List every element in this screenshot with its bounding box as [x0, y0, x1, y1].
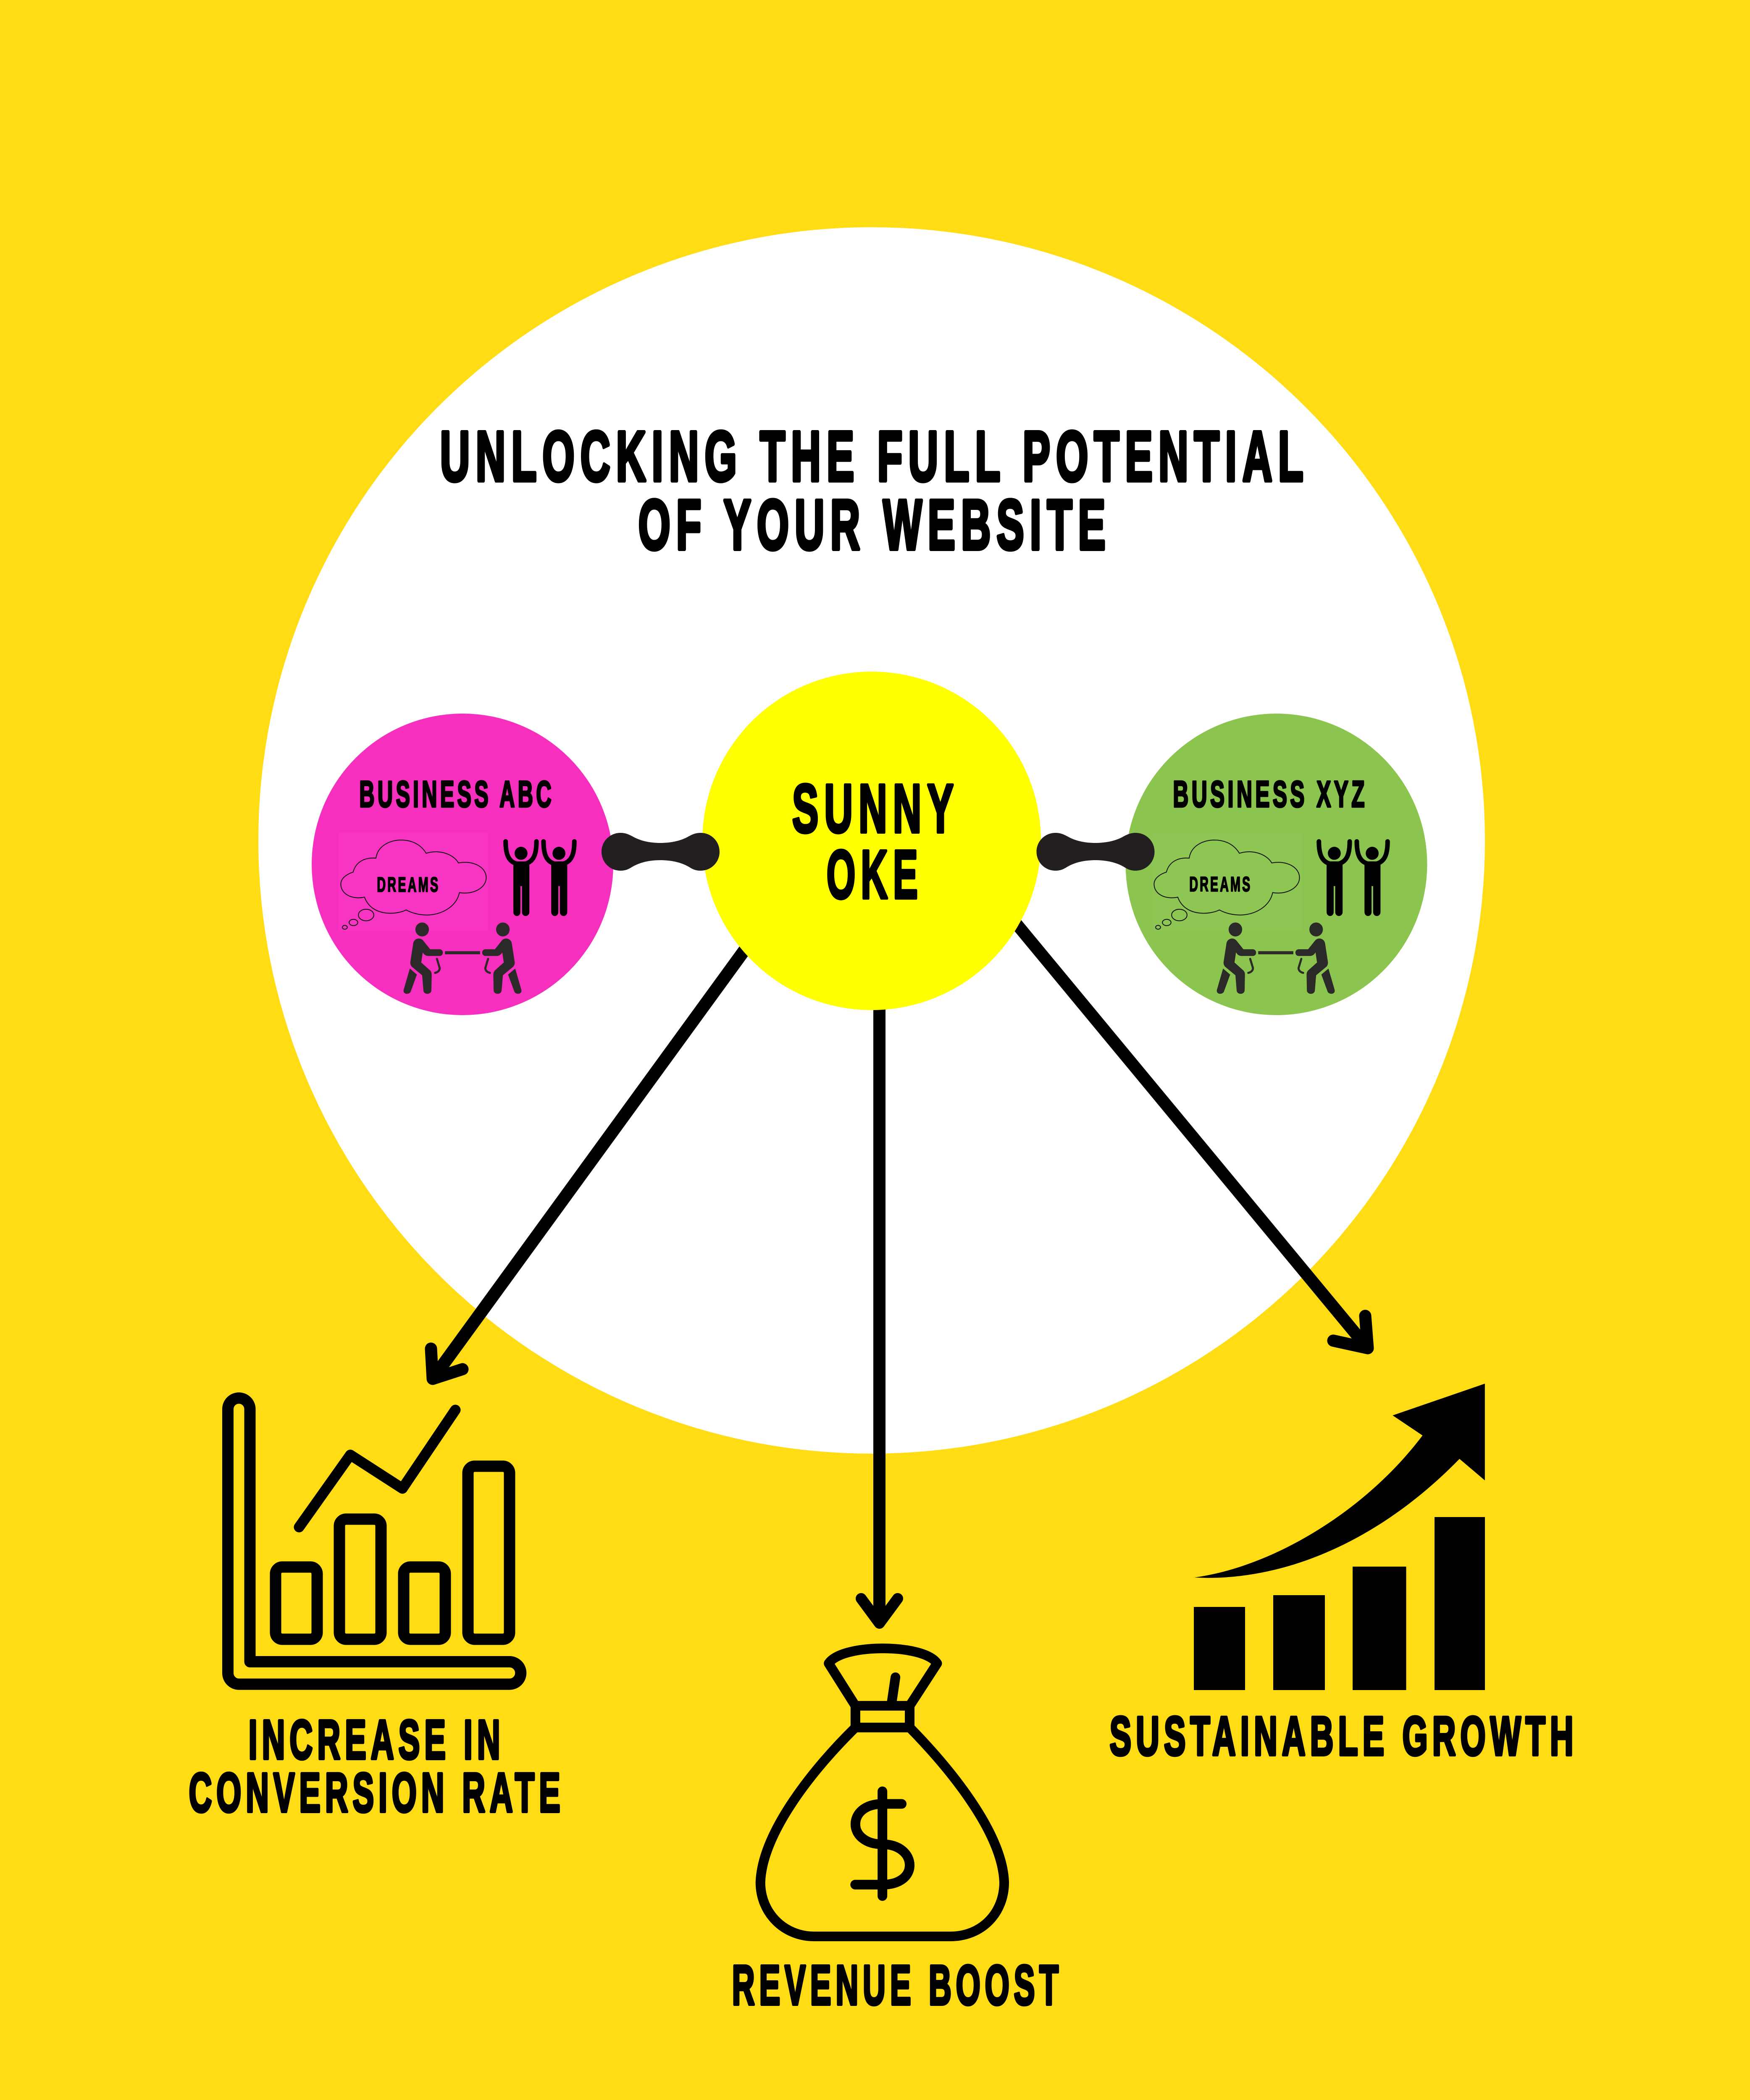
title — [440, 417, 1309, 564]
icon: bar and line chart — [228, 1398, 521, 1684]
label: increase in conversion rate: CONVERSION RATE — [189, 1761, 565, 1824]
label: increase in conversion rate — [189, 1709, 565, 1824]
panel: centre circle Sunny Oke — [702, 672, 1041, 1010]
panel: Business ABC: DREAMS — [377, 874, 440, 896]
arrow: to conversion rate — [431, 940, 752, 1379]
label: revenue boost: REVENUE BOOST — [732, 1954, 1063, 2017]
icon: money bag — [760, 1648, 1004, 1937]
arrow: to revenue boost — [861, 1000, 898, 1623]
label: increase in conversion rate: INCREASE IN — [249, 1709, 505, 1771]
panel: Business XYZ: DREAMS — [1189, 873, 1252, 896]
icon: dream cloud — [1154, 840, 1300, 929]
connector: right dumbbell — [1037, 833, 1154, 871]
panel: Business XYZ — [1126, 714, 1427, 1015]
icon: tug of war — [1217, 922, 1335, 994]
panel: Business ABC — [312, 714, 613, 1015]
panel: centre circle Sunny Oke: SUNNY — [792, 770, 959, 847]
icon: two cheering people — [506, 842, 574, 916]
connector: left dumbbell — [602, 833, 720, 871]
icon: tug of war — [404, 922, 521, 994]
icon: growth bars with arrow — [1194, 1383, 1485, 1690]
title: OF YOUR WEBSITE — [639, 485, 1111, 564]
arrow: to sustainable growth — [1010, 916, 1368, 1348]
panel: Business ABC: BUSINESS ABC — [359, 773, 554, 815]
large white circle — [258, 227, 1485, 1454]
icon: two cheering people — [1319, 842, 1387, 916]
panel: Business XYZ: BUSINESS XYZ — [1173, 773, 1368, 815]
icon: dream cloud — [341, 840, 486, 929]
panel: centre circle Sunny Oke: OKE — [827, 836, 923, 913]
